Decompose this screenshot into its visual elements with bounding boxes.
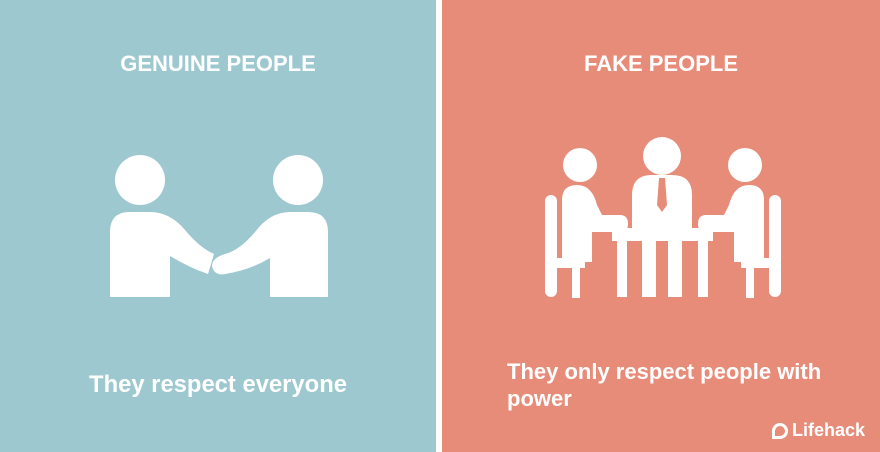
text: they respect everyone: They respect everyone [89, 371, 347, 398]
logo: lifehack: Lifehack [792, 420, 865, 440]
icon: handshake [110, 155, 328, 297]
heading: fake people: FAKE PEOPLE [584, 51, 738, 76]
icon: meeting table [545, 137, 781, 298]
text: they only respect people with power: They only respect people with [507, 359, 821, 384]
panel: fake [442, 0, 880, 452]
panel: genuine [0, 0, 436, 452]
heading: genuine people: GENUINE PEOPLE [120, 51, 316, 76]
text: they only respect people with power [507, 359, 821, 411]
text: they only respect people with power: power [507, 386, 572, 411]
